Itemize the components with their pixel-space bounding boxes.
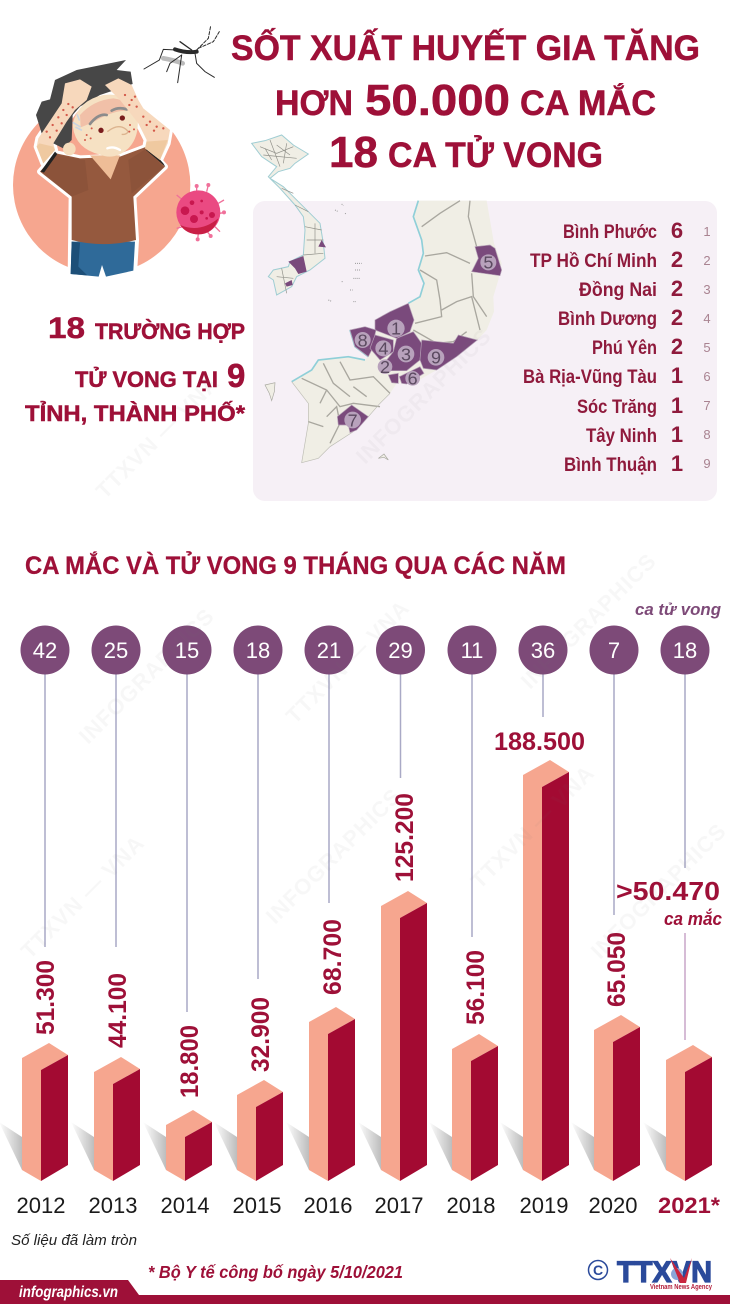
year axis labels: 2018 (447, 1193, 495, 1218)
year axis labels: 2016 (304, 1193, 352, 1218)
list indices: 8 (703, 427, 711, 442)
footer band (0, 1280, 730, 1304)
small Vietnam map (252, 135, 362, 302)
year axis labels: 2012 (17, 1193, 65, 1218)
province names: Phú Yên (592, 337, 657, 359)
death counts: 2 (671, 334, 683, 359)
province numbers: 5 (483, 253, 493, 273)
case values: ca mắc (664, 908, 723, 929)
islands (265, 383, 388, 460)
rash dots (45, 94, 164, 141)
title: 18 (329, 128, 378, 177)
heading: chart title: CA MẮC VÀ TỬ VONG 9 THÁNG QUA CÁC NĂM (25, 550, 566, 580)
province names: Đồng Nai (579, 279, 657, 301)
province numbers: 2 (380, 357, 390, 377)
note: data source: * Bộ Y tế công bố ngày 5/10/2021 (148, 1262, 403, 1282)
circle values: 36 (531, 638, 555, 663)
year axis labels (17, 1193, 720, 1218)
list indices (703, 224, 711, 471)
title (231, 28, 700, 177)
circle values: 21 (317, 638, 341, 663)
list indices: 5 (703, 340, 711, 355)
bar 2016 (309, 1007, 355, 1181)
watermarks: TTXVN — VNA (91, 370, 224, 504)
title: 50.000 (365, 76, 510, 125)
watermarks: INFOGRAPHICS (516, 548, 661, 694)
watermarks (16, 323, 730, 964)
circle values: 7 (608, 638, 620, 663)
case values: 188.500 (494, 728, 585, 756)
case values: 68.700 (319, 919, 347, 995)
province numbers: 1 (391, 319, 401, 339)
case values: 65.050 (603, 932, 631, 1007)
map: Vietnam overview and southern provinces (252, 135, 502, 463)
watermarks: INFOGRAPHICS (261, 783, 406, 929)
death counts (671, 218, 683, 476)
logo: TTXVN: Vietnam News Agency (650, 1284, 712, 1291)
text: 18 deaths in 9 provinces: TỈNH, THÀNH PHỐ* (25, 400, 245, 426)
highlighted provinces (337, 245, 502, 433)
text: 18 deaths in 9 provinces (25, 312, 245, 426)
watermarks: INFOGRAPHICS (586, 818, 730, 964)
province names: Sóc Trăng (577, 396, 657, 418)
province names: Bình Phước (563, 221, 657, 243)
province names: Bình Dương (558, 308, 657, 330)
illustration: sick man with mosquito and virus (13, 26, 225, 277)
province numbers: 7 (348, 410, 358, 430)
province names (523, 221, 657, 476)
bar shadows (0, 1122, 666, 1170)
watermarks: TTXVN — VNA (281, 595, 414, 729)
province names: Bình Thuận (564, 454, 657, 476)
connector lines (45, 674, 685, 1040)
death counts: 2 (671, 276, 683, 301)
bar chart: cases by year (22, 760, 712, 1181)
southern Vietnam land (292, 201, 502, 463)
province names: Tây Ninh (586, 425, 657, 447)
title: SỐT XUẤT HUYẾT GIA TĂNG (231, 28, 700, 68)
province numbers: 4 (378, 339, 388, 359)
circle values: 18 (246, 638, 270, 663)
case values (32, 728, 723, 1098)
case values: >50.470 (616, 876, 720, 906)
year axis labels: 2015 (233, 1193, 281, 1218)
province names: Bà Rịa-Vũng Tàu (523, 366, 657, 388)
bar 2017 (381, 891, 427, 1181)
case values: 18.800 (176, 1025, 204, 1098)
circle values: 25 (104, 638, 128, 663)
death counts: 2 (671, 247, 683, 272)
bar 2013 (94, 1057, 140, 1181)
list indices: 9 (703, 456, 711, 471)
bar 2015 (237, 1080, 283, 1181)
province numbers: 3 (401, 344, 411, 364)
province numbers (348, 253, 493, 430)
text: province list (523, 218, 711, 476)
list indices: 4 (703, 311, 711, 326)
man figure (36, 60, 170, 277)
text: 18 deaths in 9 provinces: TỬ VONG TẠI (75, 367, 218, 392)
death count circles (20, 626, 710, 674)
circle values: 29 (388, 638, 413, 663)
watermarks: TTXVN — VNA (466, 760, 599, 894)
province number markers (344, 254, 496, 428)
death counts: 1 (671, 422, 683, 447)
panel: map background (253, 201, 717, 501)
death counts: 1 (671, 393, 683, 418)
circle values: 18 (673, 638, 697, 663)
watermarks: TTXVN — VNA (16, 830, 149, 964)
title: CA TỬ VONG (388, 135, 603, 175)
year axis labels: 2013 (89, 1193, 137, 1218)
province names: TP Hồ Chí Minh (530, 250, 657, 272)
icon: mosquito (144, 26, 219, 83)
bar 2012 (22, 1043, 68, 1181)
bar 2019 (523, 760, 569, 1181)
bar 2018 (452, 1034, 498, 1181)
circle row (20, 626, 710, 674)
year axis labels: 2021* (658, 1193, 720, 1218)
province numbers: 6 (408, 369, 418, 389)
year axis labels: 2014 (161, 1193, 209, 1218)
circle values: 11 (461, 638, 483, 663)
text: 18 deaths in 9 provinces: TRƯỜNG HỢP (95, 319, 245, 344)
list indices: 7 (703, 398, 711, 413)
case values: 56.100 (462, 950, 490, 1025)
province numbers: 8 (358, 330, 368, 350)
year axis labels: 2017 (375, 1193, 423, 1218)
text: 18 deaths in 9 provinces: 18 (48, 312, 85, 345)
salmon circle backdrop (13, 96, 190, 274)
death counts: 6 (671, 218, 683, 243)
title: HƠN (275, 84, 353, 123)
icon: virus (176, 184, 225, 241)
logo: TTXVN: TTXVN (617, 1256, 712, 1289)
case values: 125.200 (391, 793, 419, 882)
provinces borders (302, 201, 487, 443)
list indices: 1 (703, 224, 711, 239)
logo: TTXVN: C (593, 1262, 603, 1278)
bar 2021 (666, 1045, 712, 1181)
circle values: 15 (175, 638, 199, 663)
watermarks: INFOGRAPHICS (74, 603, 219, 749)
list indices: 3 (703, 282, 711, 297)
text: 18 deaths in 9 provinces: 9 (227, 357, 245, 394)
title: CA MẮC (520, 83, 656, 123)
footer site name: infographics.vn (19, 1284, 118, 1301)
bar 2014 (166, 1110, 212, 1181)
circle values (33, 638, 697, 663)
death counts: 1 (671, 363, 683, 388)
watermarks: INFOGRAPHICS (351, 323, 496, 469)
bar 2020 (594, 1015, 640, 1181)
case values: 51.300 (32, 960, 60, 1035)
year axis labels: 2020 (589, 1193, 637, 1218)
year axis labels: 2019 (520, 1193, 568, 1218)
death counts: 2 (671, 305, 683, 330)
list indices: 6 (703, 369, 711, 384)
death counts: 1 (671, 451, 683, 476)
circle values: 42 (33, 638, 57, 663)
note: rounded figures: Số liệu đã làm tròn (11, 1232, 137, 1249)
case values: 32.900 (247, 997, 275, 1072)
case values: 44.100 (104, 973, 132, 1048)
province numbers: 9 (431, 348, 441, 368)
label: ca tử vong: ca tử vong (635, 601, 721, 619)
list indices: 2 (703, 253, 711, 268)
